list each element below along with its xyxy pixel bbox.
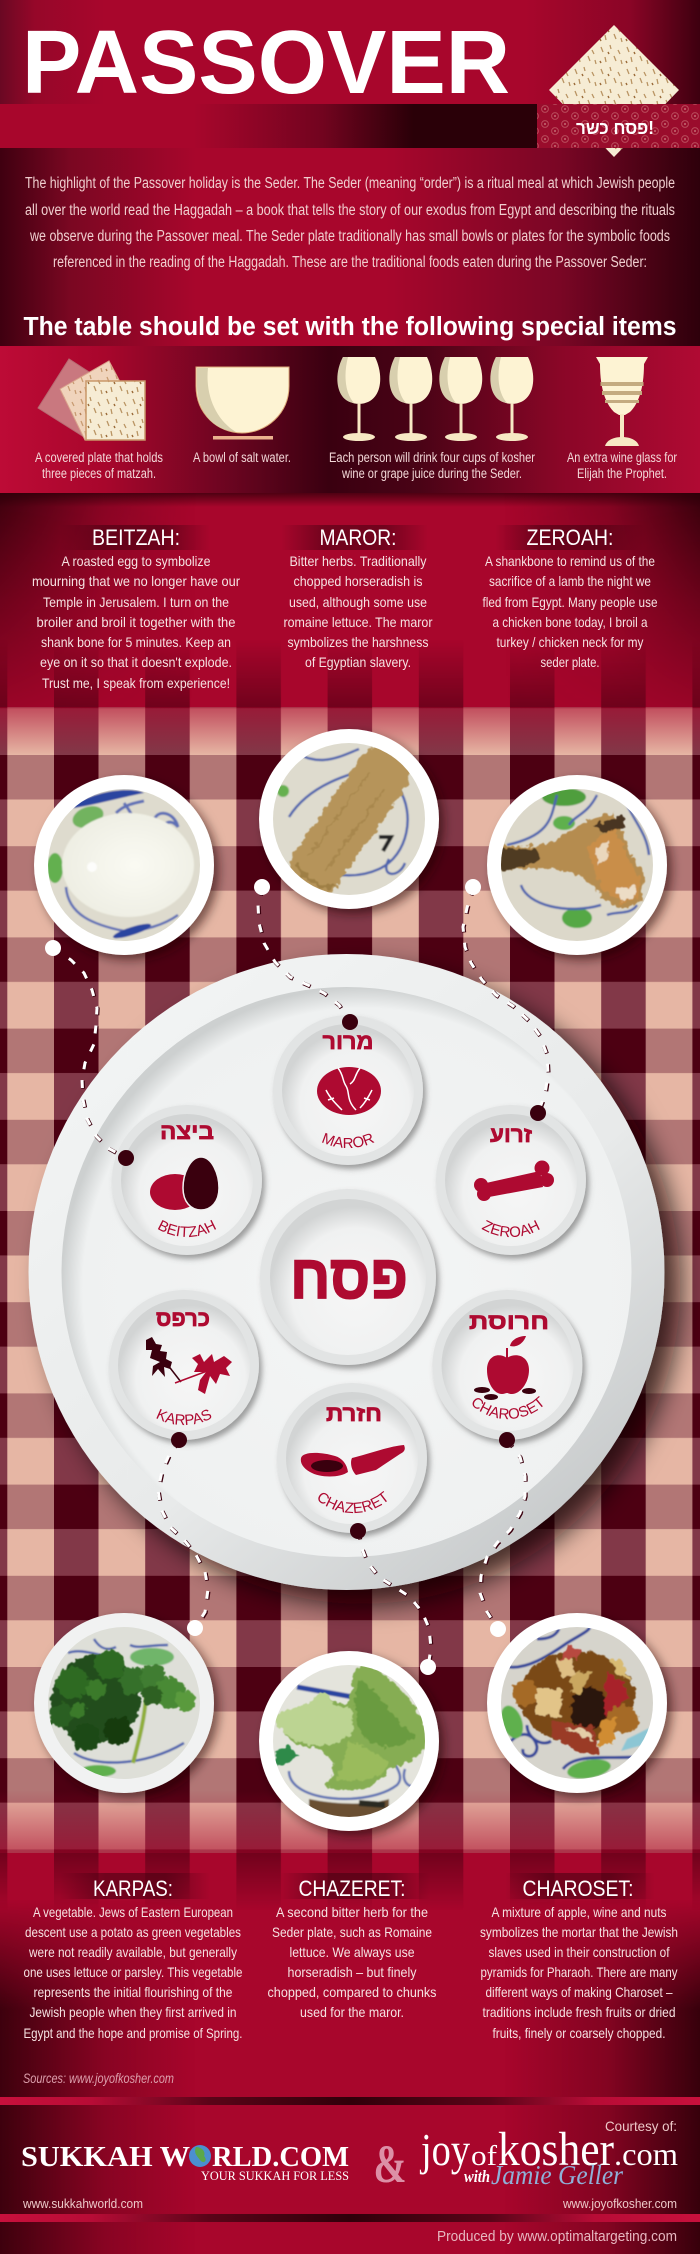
small dish: Beitzah: ביצה [160, 1119, 214, 1144]
item captions: Elijah the Prophet. [577, 466, 667, 481]
panel: Beitzah text: BEITZAH: [92, 525, 180, 550]
footer urls: www.sukkahworld.com [22, 2197, 143, 2211]
logo: Joy of Kosher: with [464, 2167, 490, 2186]
sources: Sources: www.joyofkosher.com [23, 2070, 174, 2086]
panel: Maror text: used, although some use [289, 594, 427, 610]
item captions: wine or grape juice during the Seder. [341, 466, 522, 481]
background: foods section edge shade [0, 493, 700, 707]
panel: Chazeret text: lettuce. We always use [290, 1944, 415, 1960]
connector: Beitzah [45, 940, 134, 1166]
small dish: Beitzah [112, 1105, 268, 1262]
panel: Beitzah text: mourning that we no longer have our [32, 573, 240, 589]
background: footer edge shade [0, 1908, 700, 2254]
logo: Joy of Kosher: joy [419, 2124, 470, 2175]
icon: apple [474, 1336, 536, 1400]
footer urls: www.joyofkosher.com [562, 2197, 677, 2211]
small dish: Beitzah: BEITZAH [158, 1220, 216, 1238]
connector: Zeroah [463, 879, 549, 1121]
icon: egg [150, 1157, 219, 1210]
background: items section [0, 346, 700, 493]
background: top shade [0, 493, 700, 507]
matzah diamond with ribbon: פסח כשר! [576, 118, 654, 138]
item captions: A bowl of salt water. [193, 450, 291, 465]
panel: Zeroah text: turkey / chicken neck for my [496, 634, 644, 650]
panel: Beitzah text: shank bone for 5 minutes. Keep an [41, 634, 231, 650]
production credit: Produced by www.optimaltargeting.com [437, 2228, 677, 2245]
small dish: Chazeret: חזרת [326, 1401, 382, 1426]
small dish: Maror: MAROR [322, 1132, 374, 1148]
icon: four wine glasses [337, 357, 533, 441]
logo: Sukkah World [21, 2142, 349, 2183]
item captions [35, 450, 677, 481]
panel: Karpas text [24, 1873, 243, 2041]
header band [0, 104, 537, 148]
center dish: Pesach [260, 1189, 436, 1365]
panel: Beitzah text: broiler and broil it together with the [36, 614, 236, 630]
panel: Karpas text: Jewish people when they first arrived in [30, 2004, 236, 2020]
icon: parsley [146, 1337, 232, 1394]
small dish: Chazeret [276, 1383, 434, 1540]
background: red fade onto cloth bottom [0, 1790, 700, 1853]
small dish: Maror: מרור [322, 1029, 374, 1054]
item captions: A covered plate that holds [35, 450, 163, 465]
panel: Karpas text: one uses lettuce or parsley. This vegetable [24, 1964, 243, 1980]
background: gingham tablecloth [0, 707, 700, 1853]
panel: Charoset text: fruits, finely or coarsely chopped. [492, 2025, 666, 2041]
panel: Maror text [281, 525, 433, 670]
seder plate [24, 950, 697, 1624]
icon: bowl of salt water [196, 367, 289, 440]
panel: Karpas text: descent use a potato as green vegetables [25, 1924, 241, 1940]
center dish: Pesach: פסח [290, 1243, 408, 1312]
panel: Chazeret text [268, 1873, 436, 2020]
items heading: The table should be set with the following special items [24, 313, 676, 341]
icon: Elijah cup [596, 357, 648, 446]
connector: Maror [254, 879, 358, 1030]
small dish: Karpas [108, 1290, 266, 1448]
photo: egg [34, 775, 214, 955]
panel: Karpas text: Egypt and the hope and promise of Spring. [24, 2025, 242, 2041]
background: header [0, 0, 700, 104]
photo: lettuce [259, 1651, 439, 1831]
footer: courtesy: Courtesy of: [605, 2118, 677, 2134]
logo: Joy of Kosher: .com [614, 2136, 678, 2172]
panel: Beitzah text: A roasted egg to symbolize [62, 553, 211, 569]
panel: Chazeret text: CHAZERET: [298, 1876, 406, 1901]
panel: Maror text: of Egyptian slavery. [305, 654, 411, 670]
photo: parsley [34, 1613, 214, 1793]
panel: Maror text: symbolizes the harshness [288, 634, 428, 650]
small dish: Charoset: חרוסת [469, 1309, 549, 1334]
small dish: Maror [272, 1015, 430, 1172]
panel: Zeroah text: fled from Egypt. Many people use [482, 594, 658, 610]
background: red fade onto cloth top [0, 707, 700, 755]
panel: Karpas text: A vegetable. Jews of Eastern European [33, 1904, 233, 1920]
photo: horseradish roll [259, 729, 439, 909]
panel: Chazeret text: horseradish – but finely [288, 1964, 416, 1980]
title: PASSOVER [22, 13, 510, 113]
panel: Maror text: chopped horseradish is [294, 573, 422, 589]
panel: Karpas text: KARPAS: [93, 1876, 173, 1901]
item captions: Each person will drink four cups of kosher [329, 450, 535, 465]
panel: Zeroah text [482, 525, 658, 670]
small dish: Karpas: KARPAS [156, 1408, 212, 1426]
footer stripe top [0, 2097, 700, 2105]
icon: bone [474, 1160, 554, 1201]
panel: Zeroah text: seder plate. [540, 654, 600, 670]
panel: Maror text: romaine lettuce. The maror [284, 614, 433, 630]
small dish: Karpas: כרפס [156, 1306, 210, 1331]
panel: Charoset text: CHAROSET: [522, 1876, 634, 1901]
background: columns fading out below cloth [0, 1853, 700, 1902]
panel: Chazeret text: A second bitter herb for the [276, 1904, 428, 1920]
photo: charoset [487, 1613, 667, 1793]
panel: Charoset text [480, 1873, 678, 2041]
panel: Chazeret text: used for the maror. [300, 2004, 404, 2020]
small dish: Charoset [432, 1290, 589, 1448]
icon: three matzah sheets [38, 359, 145, 440]
panel: Chazeret text: chopped, compared to chunks [268, 1984, 436, 2000]
panel: Chazeret text: Seder plate, such as Romaine [272, 1924, 432, 1940]
background: intro section [0, 148, 700, 346]
footer urls [22, 2197, 677, 2211]
logo: Joy of Kosher: kosher [498, 2123, 614, 2176]
ampersand: & [374, 2134, 406, 2194]
icon: lettuce head [317, 1067, 381, 1115]
panel: Maror text: Bitter herbs. Traditionally [290, 553, 426, 569]
panel: Zeroah text: ZEROAH: [526, 525, 614, 550]
logo: Sukkah World: RLD.COM [212, 2142, 349, 2173]
logo: Sukkah World: YOUR SUKKAH FOR LESS [201, 2168, 349, 2183]
small dish: Charoset: CHAROSET [472, 1396, 543, 1420]
small dish: Zeroah [436, 1105, 592, 1262]
panel: Zeroah text: A shankbone to remind us of the [485, 553, 655, 569]
panel: Zeroah text: sacrifice of a lamb the night we [489, 573, 651, 589]
logo: Joy of Kosher: Jamie Geller [491, 2160, 623, 2190]
panel: Beitzah text: Trust me, I speak from experience! [42, 675, 230, 691]
connector: Chazeret [350, 1523, 436, 1675]
item captions: three pieces of matzah. [42, 466, 156, 481]
logo: Joy of Kosher: of [471, 2141, 498, 2172]
intro paragraph [25, 175, 675, 271]
panel: Karpas text: represents the initial flourishing of the [34, 1984, 233, 2000]
logo: Sukkah World: SUKKAH W [21, 2142, 190, 2173]
panel: Charoset text: slaves used in their construction of [488, 1944, 670, 1960]
small dish: Zeroah: ZEROAH [482, 1220, 540, 1238]
panel: Zeroah text: a chicken bone today, I broil a [492, 614, 648, 630]
small dish: Chazeret: CHAZERET [318, 1491, 387, 1514]
panel: Beitzah text: eye on it so that it doesn't explode. [40, 654, 232, 670]
panel: Beitzah text: Temple in Jerusalem. I turn on the [43, 594, 229, 610]
panel: Beitzah text [32, 525, 240, 691]
matzah diamond with ribbon [0, 25, 700, 157]
panel: Charoset text: A mixture of apple, wine and nuts [492, 1904, 666, 1920]
connector: Charoset [480, 1432, 526, 1637]
panel: Karpas text: were not readily available, but generally [28, 1944, 237, 1960]
footer stripe bottom [0, 2214, 700, 2222]
background: columns fading in above cloth [0, 650, 700, 707]
logo: Joy of Kosher [419, 2123, 678, 2190]
small dish: Zeroah: זרוע [490, 1122, 532, 1147]
photo: shank bone [487, 775, 667, 955]
panel: Maror text: MAROR: [320, 525, 396, 550]
icon: horseradish [301, 1445, 405, 1476]
connector: Karpas [158, 1432, 209, 1636]
item captions: An extra wine glass for [567, 450, 677, 465]
icon: globe [189, 2145, 211, 2167]
